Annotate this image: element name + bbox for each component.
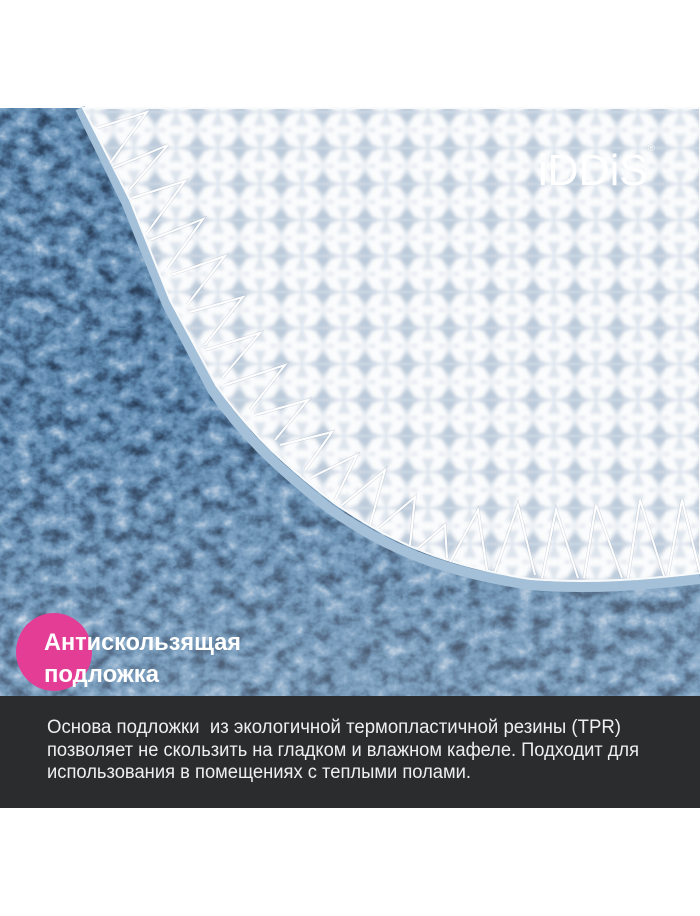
logo: iddis: ® — [648, 143, 655, 153]
description text: позволяет не скользить на гладком и влажном кафеле. Подходит для — [47, 740, 639, 761]
photo: zigzag stitching — [97, 112, 700, 578]
description text: использования в помещениях с теплыми полами. — [47, 762, 471, 783]
heading — [44, 629, 241, 688]
photo: blue bath mat pile — [0, 108, 700, 696]
description text: Основа подложки из экологичной термопластичной резины (TPR) — [47, 717, 621, 738]
pink circle accent — [16, 613, 92, 691]
description panel — [0, 696, 700, 808]
photo: white anti-slip backing — [83, 108, 700, 581]
photo: mat rope edge — [80, 108, 700, 587]
logo: iddis: iDDiS — [538, 146, 648, 195]
description text — [47, 717, 639, 783]
heading: Антискользящая — [44, 629, 241, 656]
heading: подложка — [44, 661, 160, 688]
